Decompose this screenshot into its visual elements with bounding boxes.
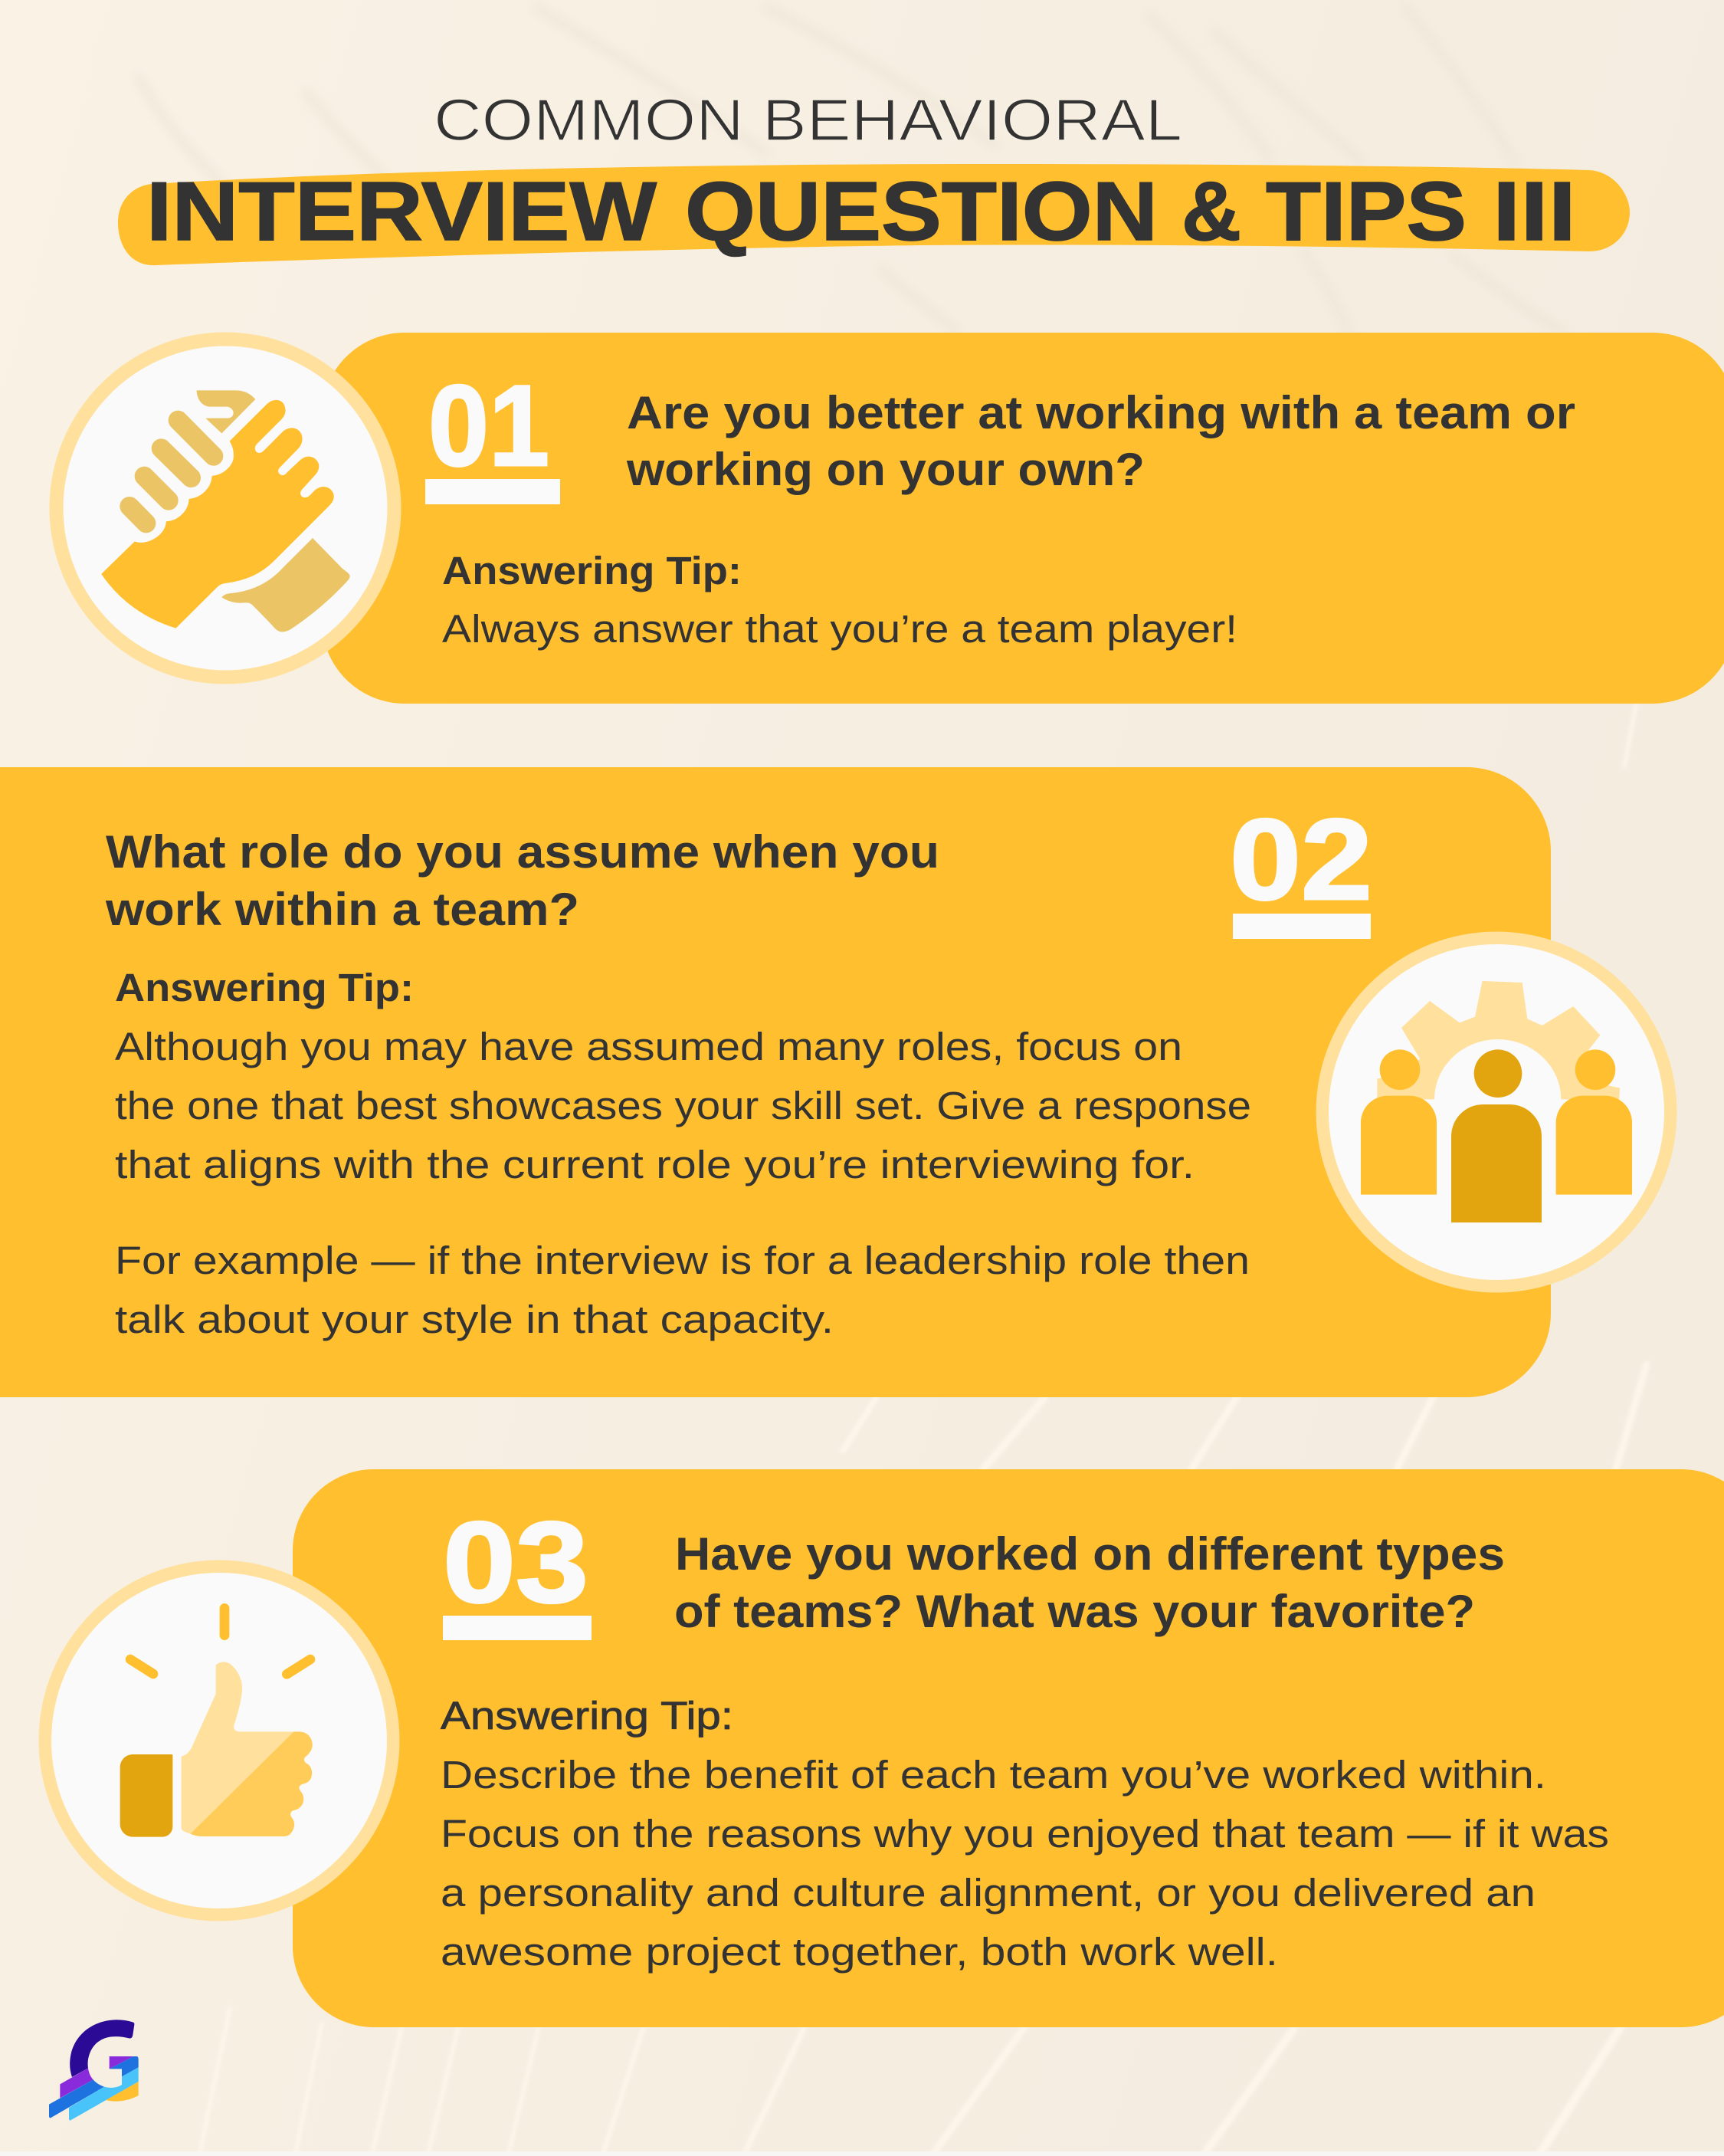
panel 2 background [0, 767, 1551, 1397]
number 01 underline [425, 479, 560, 504]
question 1 [626, 387, 1575, 495]
answering tip 3: a personality and culture alignment, or you delivered an [441, 1871, 1536, 1915]
answering tip 1: Always answer that you’re a team player! [442, 607, 1237, 651]
panel 3 content [441, 1498, 1609, 1974]
number 02 underline [1233, 914, 1371, 939]
title line: interview question and tips: & [1182, 165, 1241, 258]
panel 3 background [293, 1469, 1724, 2027]
title [118, 87, 1630, 265]
answering tip 3: awesome project together, both work well. [441, 1930, 1278, 1974]
question 3: Have you worked on different types [675, 1528, 1505, 1580]
answering tip 3: Answering Tip: [441, 1694, 733, 1738]
answering tip 3: Describe the benefit of each team you’ve worked within. [441, 1753, 1546, 1797]
logo [49, 2020, 139, 2121]
answering tip 2 [115, 966, 1251, 1341]
answering tip 2: that aligns with the current role you’re interviewing for. [115, 1143, 1195, 1186]
answering tip 2: For example — if the interview is for a leadership role then [115, 1239, 1250, 1282]
title line: interview question and tips [146, 165, 1576, 258]
icon: handshake [49, 333, 402, 684]
answering tip 3 [441, 1694, 1609, 1974]
answering tip 2: talk about your style in that capacity. [115, 1298, 834, 1341]
number 02: 02 [1230, 795, 1372, 924]
title line: common behavioral: COMMON BEHAVIORAL [434, 87, 1182, 153]
title line: interview question and tips: III [1493, 165, 1576, 258]
answering tip 3: Focus on the reasons why you enjoyed that team — if it was [441, 1812, 1609, 1856]
number 03: 03 [443, 1498, 588, 1626]
question 2 [105, 826, 939, 935]
answering tip 2: the one that best showcases your skill set. Give a response [115, 1084, 1251, 1127]
question 2: What role do you assume when you [106, 826, 939, 878]
panel 2 content [105, 795, 1372, 1341]
title brush stroke [118, 164, 1630, 265]
title line: interview question and tips: TIPS [1266, 165, 1467, 258]
icon: team with gear [1316, 932, 1676, 1292]
icon: thumbs up [38, 1560, 400, 1921]
question 2: work within a team? [105, 884, 579, 935]
question 1: working on your own? [626, 444, 1145, 495]
panel 1 content [425, 361, 1575, 651]
question 3: of teams? What was your favorite? [674, 1586, 1475, 1637]
panel 1 background [322, 333, 1724, 704]
title line: interview question and tips: INTERVIEW [146, 165, 657, 258]
answering tip 2: Although you may have assumed many roles, focus on [115, 1025, 1182, 1068]
question 3 [674, 1528, 1505, 1637]
number 03 underline [443, 1616, 592, 1640]
answering tip 2: Answering Tip: [115, 966, 414, 1009]
answering tip 1: Answering Tip: [442, 549, 742, 592]
title line: interview question and tips: QUESTION [685, 165, 1158, 258]
answering tip 1 [442, 549, 1237, 651]
number 01: 01 [428, 361, 549, 490]
question 1: Are you better at working with a team or [627, 387, 1575, 438]
